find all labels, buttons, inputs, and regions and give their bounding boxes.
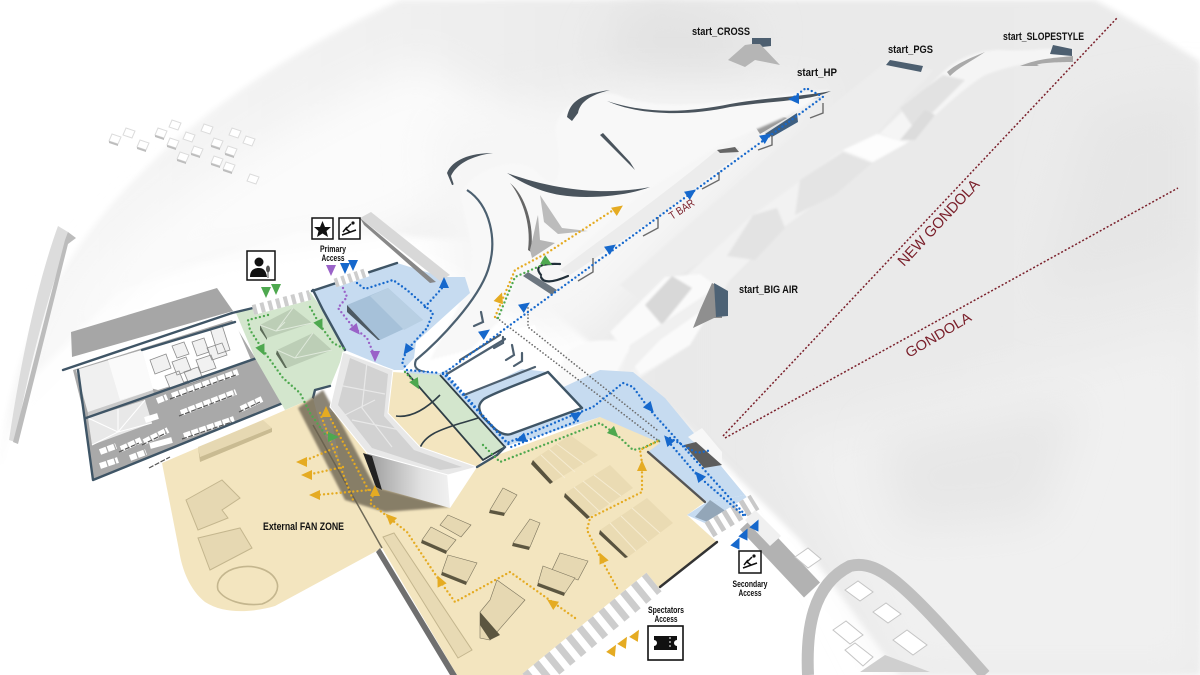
- start labels: start_CROSS: [692, 26, 750, 38]
- fan zone buildings: [186, 480, 278, 605]
- halfpipe with T-bar slope: [560, 147, 739, 275]
- start cross platform shadow: [728, 44, 780, 67]
- label: secondary access: Access: [738, 588, 762, 598]
- white service bay: [142, 322, 251, 390]
- white tent: [88, 400, 152, 445]
- road on the far left: [9, 226, 76, 444]
- edge shadow of zone divider: [376, 548, 457, 675]
- blue zone: primary access: [313, 263, 470, 370]
- icon: skier secondary access: [739, 551, 761, 573]
- wall at primary access: [360, 212, 450, 283]
- label: secondary access: [732, 579, 768, 598]
- route: purple dotted path: [338, 288, 375, 357]
- green zone: central: [407, 373, 505, 460]
- green tents: [260, 308, 332, 368]
- secondary access building: [684, 428, 781, 546]
- route: blue dotted paths: [357, 88, 823, 517]
- label: external fan zone: External FAN ZONE: [263, 521, 344, 533]
- icon: media person: [247, 251, 275, 280]
- tables in service bay: [150, 325, 230, 388]
- route: grey service lines: [497, 308, 660, 442]
- kiosk shadows: [421, 510, 565, 640]
- start labels: start_BIG AIR: [739, 284, 798, 296]
- village at top left: [109, 120, 259, 184]
- gondola lines: [723, 18, 1178, 438]
- long storage building, main zone: [383, 533, 472, 658]
- label: T bar: T BAR: [667, 197, 697, 223]
- starting gates: [693, 38, 1072, 328]
- start labels: start_PGS: [888, 44, 933, 56]
- route: green dotted paths: [248, 263, 660, 462]
- green zone walls: [232, 263, 397, 398]
- label: gondola: GONDOLA: [902, 308, 975, 361]
- vehicles in rows: [100, 372, 262, 466]
- arrow: purple: [326, 265, 380, 362]
- yellow zone: external fan zone: [162, 398, 382, 611]
- label: new gondola: NEW GONDOLA: [894, 176, 983, 270]
- green zone: media access: [236, 292, 345, 410]
- yellow zone: main spectator zone: [330, 412, 717, 675]
- access wall lines around zones: [477, 447, 753, 587]
- road and houses at bottom right: [748, 522, 985, 675]
- label: spectators access: Access: [654, 614, 678, 624]
- start labels: [692, 26, 1084, 296]
- label: primary access: Primary: [320, 244, 346, 254]
- arrows: yellow: [296, 201, 647, 657]
- outer wall of the lot: [63, 313, 283, 480]
- terminals of lifts near the base: [447, 264, 568, 395]
- long building, fan zone: [198, 420, 272, 462]
- blue zone: main road and lower access: [403, 362, 745, 502]
- kiosks and small buildings: [422, 488, 588, 640]
- parking: back roof: [71, 288, 233, 357]
- label: spectators access: [648, 605, 684, 624]
- arrows: green: [255, 255, 622, 442]
- start labels: start_HP: [797, 67, 837, 79]
- terrain: cross course ribbon with crescents: [415, 90, 831, 375]
- yellow zone: central: [388, 372, 483, 467]
- start labels: start_SLOPESTYLE: [1003, 31, 1084, 43]
- route: yellow dotted paths: [302, 207, 660, 618]
- icon: ticket: [648, 626, 683, 660]
- slope: big air, PGS and slopestyle courses: [548, 48, 1073, 440]
- label: secondary access: Secondary: [732, 579, 768, 589]
- yellow tents: [531, 435, 673, 558]
- crosswalks: [253, 272, 755, 675]
- blue hall: [347, 288, 423, 340]
- white islands in road: [445, 325, 582, 435]
- central zone divider lines: [396, 373, 505, 460]
- icon: skier primary access: [339, 218, 360, 239]
- label: primary access: [320, 244, 346, 263]
- T-bar pylons: [578, 103, 823, 281]
- cross shadow of main building: [298, 390, 450, 512]
- snow wall near the halfpipe base: [523, 272, 557, 295]
- white hall: [76, 350, 153, 413]
- arrows: blue: [340, 94, 799, 550]
- parking and logistics lot: [63, 313, 283, 480]
- label: spectators access: Spectators: [648, 605, 684, 615]
- main building: [330, 352, 477, 508]
- label: primary access: Access: [322, 253, 344, 263]
- icon: star access: [312, 218, 333, 239]
